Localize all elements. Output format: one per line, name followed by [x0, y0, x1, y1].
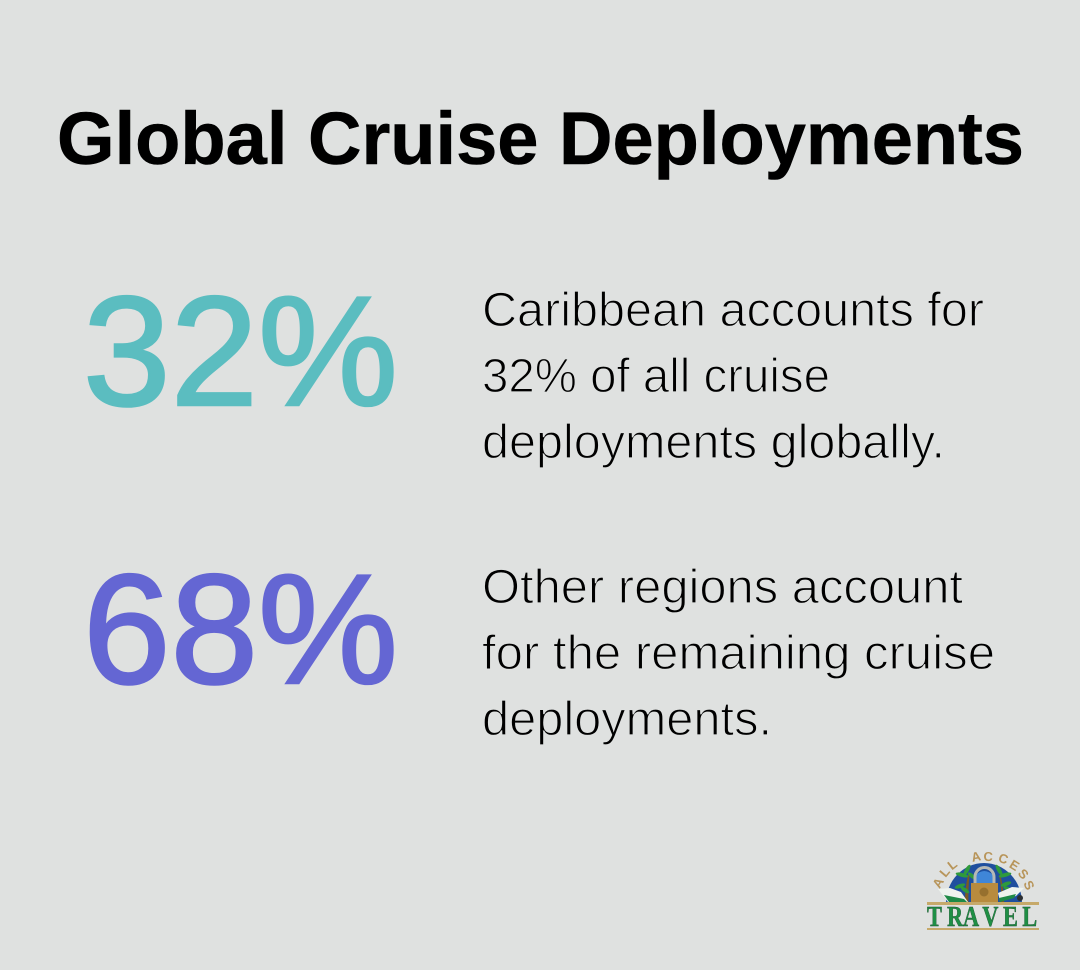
text block: Caribbean description — [482, 284, 984, 469]
icon: wheel — [1017, 895, 1023, 901]
stat: 68 percent: 68% — [83, 543, 398, 717]
icon: padlock — [971, 868, 998, 902]
logo arc lettering: L — [936, 864, 953, 880]
text block: other regions description: deployments. — [482, 693, 772, 746]
text block: other regions description: for the remaining cruise — [482, 627, 995, 680]
logo wordmark: TRAVEL — [927, 902, 1037, 933]
logo rule bottom — [927, 928, 1039, 930]
logo arc lettering: S — [1020, 878, 1038, 892]
logo arc lettering: C — [997, 850, 1011, 867]
text block: Caribbean description: 32% of all cruise — [482, 350, 830, 403]
logo arc lettering: A — [929, 874, 947, 891]
stat: 32 percent: 32% — [83, 265, 398, 439]
logo rule top — [927, 902, 1039, 905]
text block: other regions description — [482, 561, 995, 746]
logo arc lettering: S — [1015, 866, 1032, 882]
logo arc lettering: C — [983, 849, 994, 864]
text block: Caribbean description: Caribbean accounts for — [482, 284, 984, 337]
logo: All Access Travel — [927, 848, 1039, 933]
icon: palm trees — [954, 864, 1013, 902]
logo arc lettering: L — [944, 856, 960, 873]
title: Global Cruise Deployments — [57, 97, 1024, 180]
logo arc lettering: A — [970, 848, 983, 865]
icon: right ship — [998, 887, 1024, 901]
icon: globe dome — [946, 863, 1022, 903]
icon: left ship — [938, 888, 968, 902]
text block: other regions description: Other regions account — [482, 561, 963, 614]
text block: Caribbean description: deployments globally. — [482, 416, 945, 469]
logo arc lettering — [929, 848, 1038, 892]
logo arc lettering: E — [1007, 857, 1022, 874]
